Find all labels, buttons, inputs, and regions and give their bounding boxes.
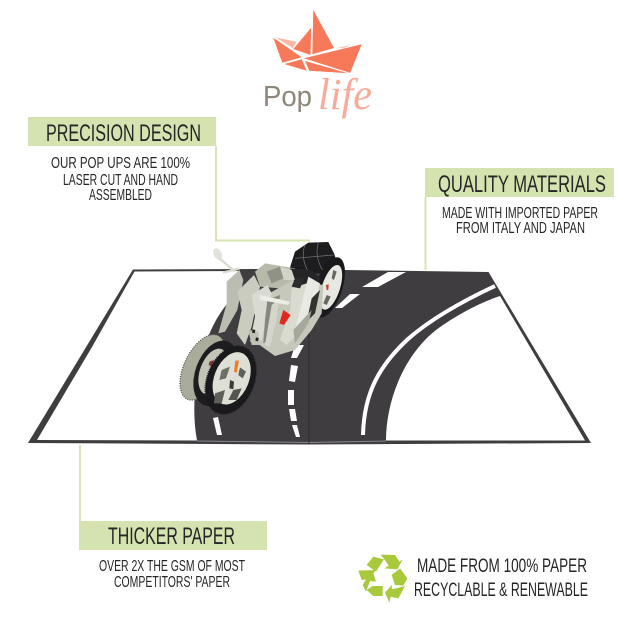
body text	[51, 155, 190, 204]
engine and frame	[218, 263, 323, 356]
panel: thicker paper	[79, 521, 267, 591]
left white page	[37, 271, 240, 440]
connector lines	[80, 146, 426, 521]
icon: recycling arrows	[358, 555, 407, 603]
middle wheel	[185, 334, 247, 412]
rear wheel	[307, 253, 351, 321]
icon: origami boat	[273, 10, 362, 74]
fold line	[308, 320, 310, 444]
pop-up card photo	[28, 242, 591, 444]
road centre dashes	[213, 272, 406, 437]
heading: THICKER PAPER	[108, 523, 235, 550]
body text: OVER 2X THE GSM OF MOST	[99, 558, 245, 575]
heading banner	[28, 117, 216, 146]
panel: precision design	[28, 117, 216, 204]
red reflector	[279, 310, 291, 325]
back wheel layer	[171, 328, 235, 407]
mirror	[212, 247, 239, 273]
recyclable message	[414, 556, 588, 601]
seat	[290, 242, 337, 273]
heading: PRECISION DESIGN	[46, 120, 201, 147]
logo wordmark: life: life	[318, 70, 372, 119]
body text: ASSEMBLED	[89, 187, 152, 204]
body text	[99, 558, 245, 591]
body text: OUR POP UPS ARE 100%	[51, 155, 190, 172]
logo: Poplife boat	[263, 10, 372, 119]
right white page	[386, 296, 585, 440]
panel: quality materials	[425, 168, 614, 237]
heading banner	[425, 168, 614, 197]
heading banner	[79, 521, 267, 550]
card base and road	[28, 269, 591, 444]
road bottom edge highlight	[197, 441, 386, 442]
front wheel	[196, 338, 266, 421]
body text	[442, 205, 598, 237]
body text: COMPETITORS' PAPER	[114, 574, 230, 591]
body text: LASER CUT AND HAND	[63, 172, 178, 189]
road edge line	[363, 286, 495, 435]
motorcycle	[171, 242, 351, 421]
logo wordmark: Pop: Pop	[263, 81, 312, 113]
